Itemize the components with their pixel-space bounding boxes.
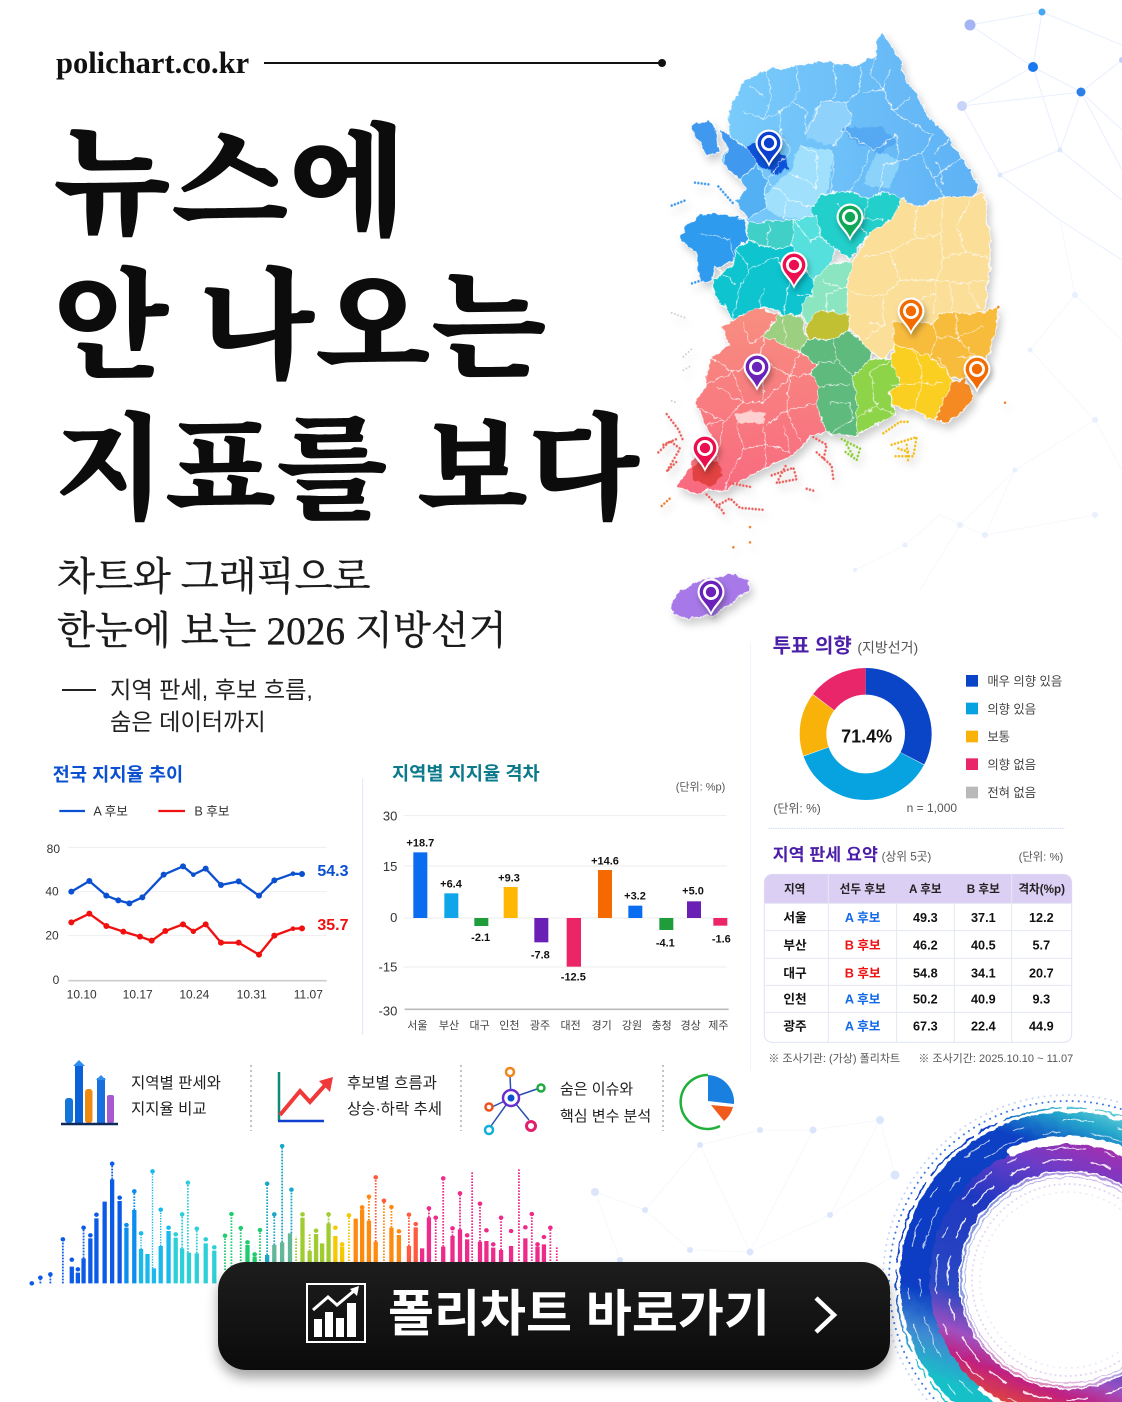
heading: 전국 지지율 추이 xyxy=(53,764,183,785)
summary table: 40.5 xyxy=(971,939,996,953)
pin: Gangwon south xyxy=(836,204,864,241)
summary table: A 후보 xyxy=(845,993,881,1007)
legend: B 후보 xyxy=(194,805,230,819)
pin: Daegu xyxy=(898,298,924,335)
value labels: +3.2 xyxy=(624,891,646,903)
summary table: 5.7 xyxy=(1033,939,1050,953)
value labels: +14.6 xyxy=(591,855,619,867)
summary table: 44.9 xyxy=(1029,1020,1054,1034)
value labels: -2.1 xyxy=(471,932,490,944)
donut legend: 의향 있음 xyxy=(987,702,1036,716)
summary table xyxy=(764,874,1072,1042)
pin: Jeju xyxy=(698,578,724,616)
summary table: B 후보 xyxy=(967,882,1000,896)
footnotes xyxy=(768,1052,1073,1065)
summary table: 46.2 xyxy=(913,939,938,953)
series A xyxy=(68,863,349,906)
axes: 80 xyxy=(47,842,60,856)
value labels: -7.8 xyxy=(531,950,550,962)
icon row xyxy=(61,1060,734,1136)
value labels: +9.3 xyxy=(498,872,520,884)
summary table: A 후보 xyxy=(845,911,881,925)
main title: 안 나오는 xyxy=(53,261,547,394)
heading: 지역별 지지율 격차 xyxy=(392,763,540,784)
value labels xyxy=(406,838,731,984)
summary table: 12.2 xyxy=(1029,911,1054,925)
panel: voting intention donut and summary table xyxy=(750,635,1073,1070)
summary table: 격차(%p) xyxy=(1018,883,1065,896)
text: trend xyxy=(347,1074,442,1118)
heading: regional summary: (상위 5곳) xyxy=(882,851,931,864)
region labels: 대구 xyxy=(470,1019,490,1032)
main title xyxy=(53,117,640,534)
donut legend: 매우 의향 있음 xyxy=(987,674,1062,688)
summary table: 부산 xyxy=(783,939,807,953)
region labels: 제주 xyxy=(708,1019,728,1032)
region labels: 경상 xyxy=(681,1019,701,1032)
pin: Ulsan xyxy=(964,356,990,393)
axes xyxy=(379,809,729,1018)
main title: 뉴스에 xyxy=(53,117,407,252)
legend xyxy=(59,805,230,819)
axes: 0 xyxy=(390,910,397,925)
donut chart xyxy=(813,681,918,787)
region labels xyxy=(407,1018,728,1032)
summary table: 선두 후보 xyxy=(840,882,886,896)
text: comparison: 지지율 비교 xyxy=(131,1100,207,1118)
summary table: 대구 xyxy=(783,966,807,980)
text: issues xyxy=(560,1081,651,1125)
summary table: 40.9 xyxy=(971,993,996,1007)
donut notes xyxy=(773,801,957,816)
main title: 지표를 보다 xyxy=(53,406,640,534)
map location pins xyxy=(690,130,996,620)
series A: 54.3 xyxy=(317,863,349,880)
summary table: 20.7 xyxy=(1029,966,1054,980)
pin: Jeonnam xyxy=(692,434,718,472)
panel: regional gap bar chart xyxy=(379,763,731,1032)
donut notes: n = 1,000 xyxy=(907,801,957,815)
pin: Seoul xyxy=(756,130,782,167)
region labels: 광주 xyxy=(530,1019,550,1032)
subtitle: 차트와 그래픽으로 xyxy=(57,555,371,599)
donut legend: 의향 없음 xyxy=(987,758,1036,772)
region labels: 경기 xyxy=(592,1019,612,1032)
icon: rising trend xyxy=(278,1072,333,1121)
donut notes: (단위: %) xyxy=(773,802,821,816)
map of South Korea xyxy=(657,32,1006,628)
region labels: 인천 xyxy=(499,1018,519,1032)
subtitle: 한눈에 보는 2026 지방선거 xyxy=(57,609,507,653)
summary table: 서울 xyxy=(783,911,807,925)
summary table: 37.1 xyxy=(971,911,996,925)
donut centre value: 71.4% xyxy=(841,727,892,747)
summary table: 49.3 xyxy=(913,911,938,925)
region labels: 서울 xyxy=(407,1019,427,1032)
value labels: +18.7 xyxy=(406,838,434,850)
axes xyxy=(45,842,327,1002)
icon: bar chart xyxy=(61,1060,118,1124)
axes: 0 xyxy=(53,973,60,987)
subtitle xyxy=(57,555,507,653)
text: trend: 상승·하락 추세 xyxy=(347,1100,442,1118)
axes: 15 xyxy=(383,859,397,874)
heading: vote intention: 투표 의향 xyxy=(773,635,852,658)
donut legend: 전혀 없음 xyxy=(987,786,1036,800)
summary table: 67.3 xyxy=(913,1020,938,1034)
summary table: 22.4 xyxy=(971,1020,996,1034)
axes: 10.24 xyxy=(179,988,210,1002)
text: issues: 핵심 변수 분석 xyxy=(560,1108,651,1125)
footnotes: ※ 조사기관: (가상) 폴리차트 xyxy=(768,1052,900,1065)
tagline: 숨은 데이터까지 xyxy=(110,709,266,735)
donut legend xyxy=(966,674,1062,800)
decorative equalizer histogram xyxy=(30,1144,558,1286)
tagline xyxy=(62,677,313,735)
summary table: A 후보 xyxy=(845,1020,881,1034)
heading: regional summary: (단위: %) xyxy=(1019,851,1064,864)
axes: 10.17 xyxy=(123,988,153,1002)
decorative brush ring xyxy=(882,1094,1122,1402)
region labels: 대전 xyxy=(561,1019,581,1032)
summary table: B 후보 xyxy=(845,939,881,953)
legend: A 후보 xyxy=(93,805,128,819)
series B xyxy=(68,911,349,958)
value labels: -1.6 xyxy=(712,933,731,945)
axes: 10.31 xyxy=(237,988,267,1002)
series B: 35.7 xyxy=(317,917,349,934)
axes: 40 xyxy=(45,885,59,899)
summary table: 인천 xyxy=(783,993,807,1007)
donut legend: 보통 xyxy=(987,730,1010,744)
text: issues: 숨은 이슈와 xyxy=(560,1081,633,1098)
axes: 10.10 xyxy=(67,988,97,1002)
summary table: 지역 xyxy=(784,883,805,896)
icon: network xyxy=(485,1068,544,1134)
tagline: 지역 판세, 후보 흐름, xyxy=(110,677,313,703)
pin: Daejeon area xyxy=(780,252,808,289)
icon: chart box xyxy=(306,1283,366,1343)
region labels: 부산 xyxy=(439,1019,459,1032)
heading: regional summary xyxy=(773,845,1064,865)
axes: -15 xyxy=(379,960,397,975)
axes: -30 xyxy=(379,1003,397,1018)
summary table: B 후보 xyxy=(845,966,881,980)
region labels: 강원 xyxy=(622,1019,642,1032)
text: comparison xyxy=(131,1074,221,1118)
summary table: 50.2 xyxy=(913,993,938,1007)
summary table: 9.3 xyxy=(1033,993,1050,1007)
heading: vote intention xyxy=(773,635,918,658)
text: comparison: 지역별 판세와 xyxy=(131,1074,221,1092)
panel: national approval line chart xyxy=(45,764,364,1035)
icon: chevron xyxy=(814,1296,838,1334)
axes: 11.07 xyxy=(294,988,323,1002)
summary table: 54.8 xyxy=(913,966,938,980)
button label: 폴리차트 바로가기 xyxy=(388,1286,770,1342)
rule with end dot xyxy=(264,59,666,67)
icon: pie xyxy=(681,1075,734,1129)
footnotes: ※ 조사기간: 2025.10.10 ~ 11.07 xyxy=(918,1052,1073,1065)
value labels: +5.0 xyxy=(682,886,704,898)
panel: regional gap bar chart: (단위: %p) xyxy=(676,781,725,794)
value labels: -4.1 xyxy=(656,937,675,949)
bars xyxy=(413,852,727,967)
text: trend: 후보별 흐름과 xyxy=(347,1074,437,1092)
call to action button xyxy=(218,1262,890,1370)
summary table: 34.1 xyxy=(971,966,996,980)
site name: polichart.co.kr xyxy=(56,46,249,80)
value labels: -12.5 xyxy=(561,972,586,984)
region labels: 충청 xyxy=(652,1019,672,1032)
pin: Jeonbuk xyxy=(744,354,770,391)
value labels: +6.4 xyxy=(440,879,463,891)
heading: vote intention: (지방선거) xyxy=(857,640,918,656)
axes: 30 xyxy=(383,809,397,824)
axes: 20 xyxy=(45,929,59,943)
summary table: A 후보 xyxy=(909,882,942,896)
heading: regional summary: 지역 판세 요약 xyxy=(773,845,878,865)
summary table: 광주 xyxy=(783,1020,807,1034)
